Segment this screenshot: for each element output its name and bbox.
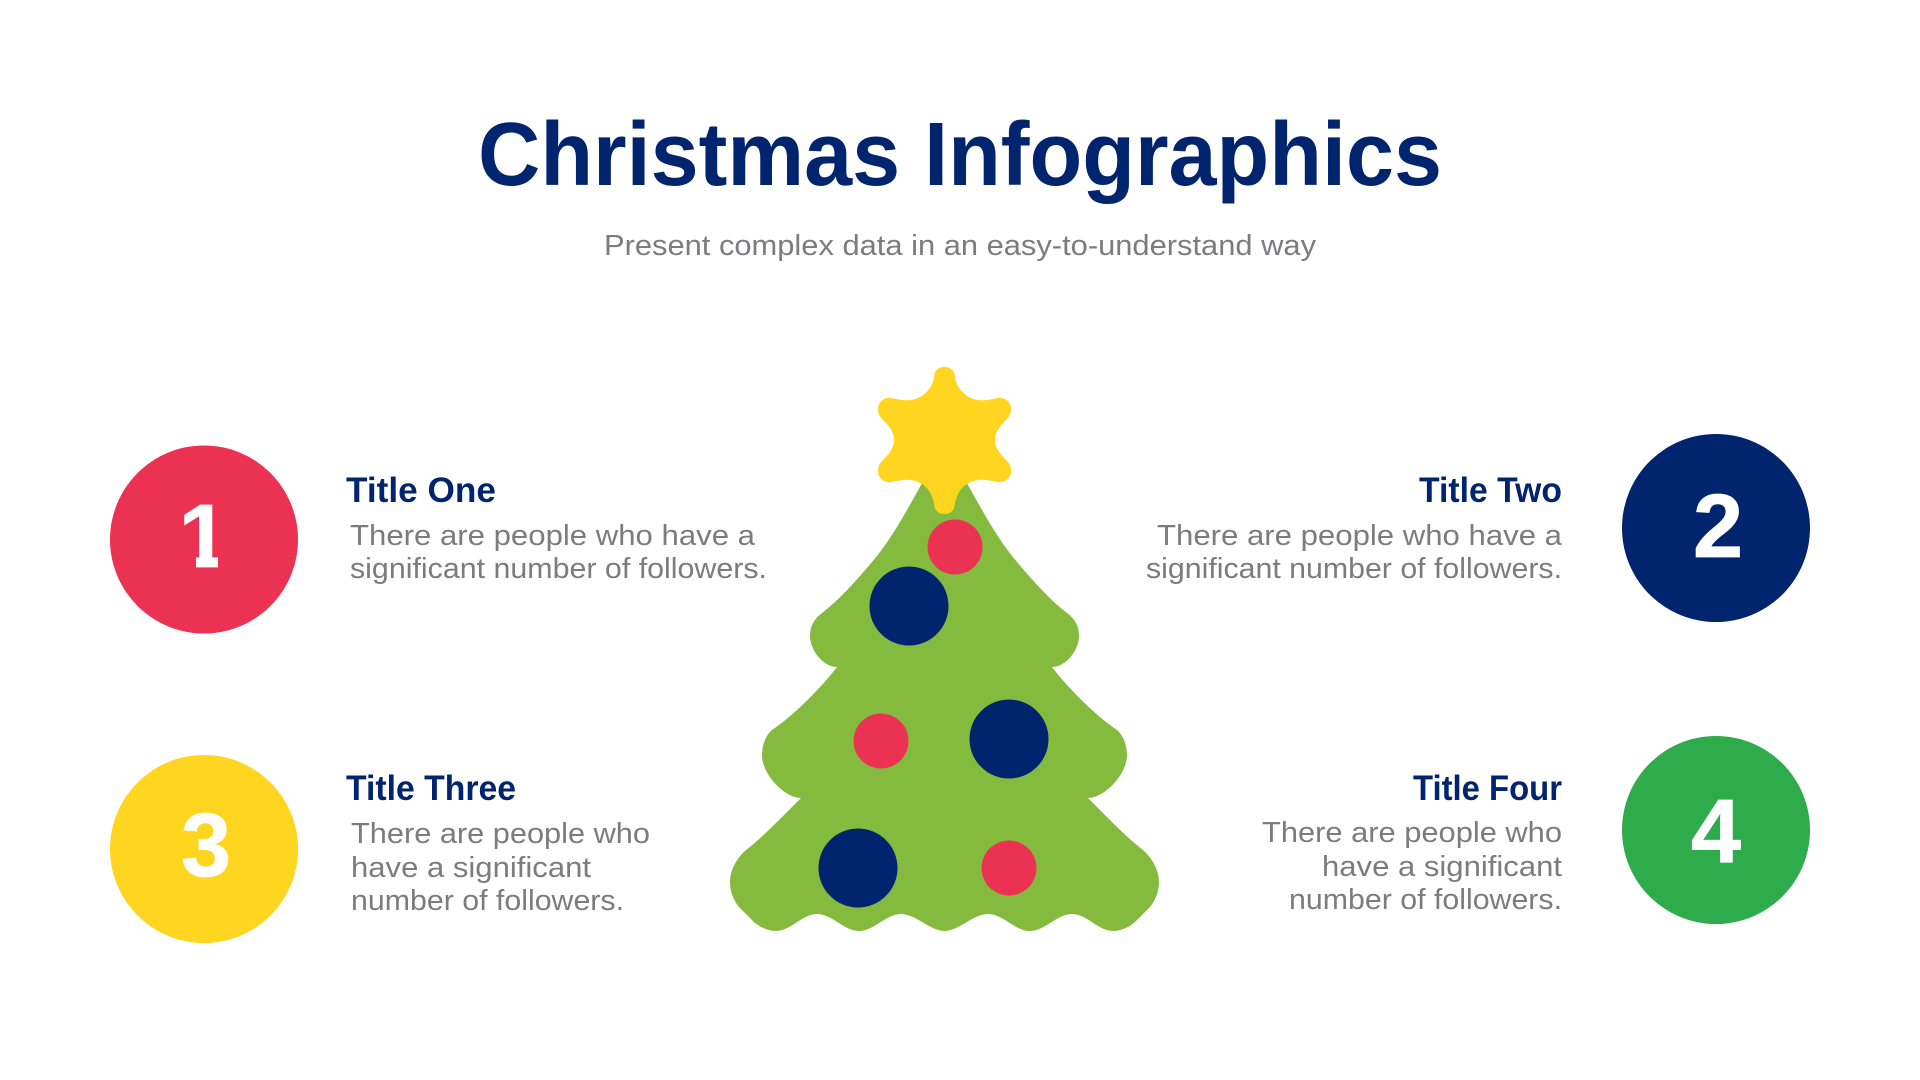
text block: item two: significant number of followers.: [1146, 553, 1562, 585]
text block: item three: number of followers.: [351, 885, 624, 917]
text block: item one: [350, 520, 767, 585]
tree body: [730, 460, 1159, 931]
panel: item four: [1262, 736, 1810, 924]
panel: item three: [110, 755, 650, 943]
text block: item four: have a significant: [1322, 851, 1562, 883]
text block: item two: There are people who have a: [1157, 520, 1563, 552]
number badge 3: 3: [181, 796, 231, 896]
text block: item four: [1262, 817, 1562, 916]
number badge 3: [110, 755, 298, 943]
ornaments: [818, 520, 1048, 908]
icon: christmas tree: [730, 367, 1159, 931]
subtitle: Present complex data in an easy-to-understand way: [604, 230, 1317, 262]
heading: title two: Title Two: [1419, 471, 1562, 510]
text block: item one: significant number of followers.: [350, 553, 767, 585]
number badge 4: 4: [1691, 782, 1741, 882]
panel: item one: [110, 446, 767, 634]
number badge 4: [1622, 736, 1810, 924]
text block: item four: number of followers.: [1289, 884, 1562, 916]
title: Christmas Infographics: [478, 105, 1442, 205]
text block: item three: have a significant: [351, 852, 591, 884]
heading: title three: Title Three: [346, 769, 516, 808]
heading: title four: Title Four: [1413, 769, 1562, 808]
text block: item one: There are people who have a: [350, 520, 756, 552]
text block: item three: [351, 818, 650, 917]
text block: item two: [1146, 520, 1563, 585]
heading: title one: Title One: [346, 471, 496, 510]
text block: item four: There are people who: [1262, 817, 1562, 849]
panel: item two: [1146, 434, 1810, 622]
number badge 2: 2: [1693, 477, 1743, 577]
number badge 1: 1: [178, 487, 229, 587]
star: [878, 367, 1011, 514]
text block: item three: There are people who: [351, 818, 650, 850]
number badge 1: [110, 446, 298, 634]
number badge 2: [1622, 434, 1810, 622]
